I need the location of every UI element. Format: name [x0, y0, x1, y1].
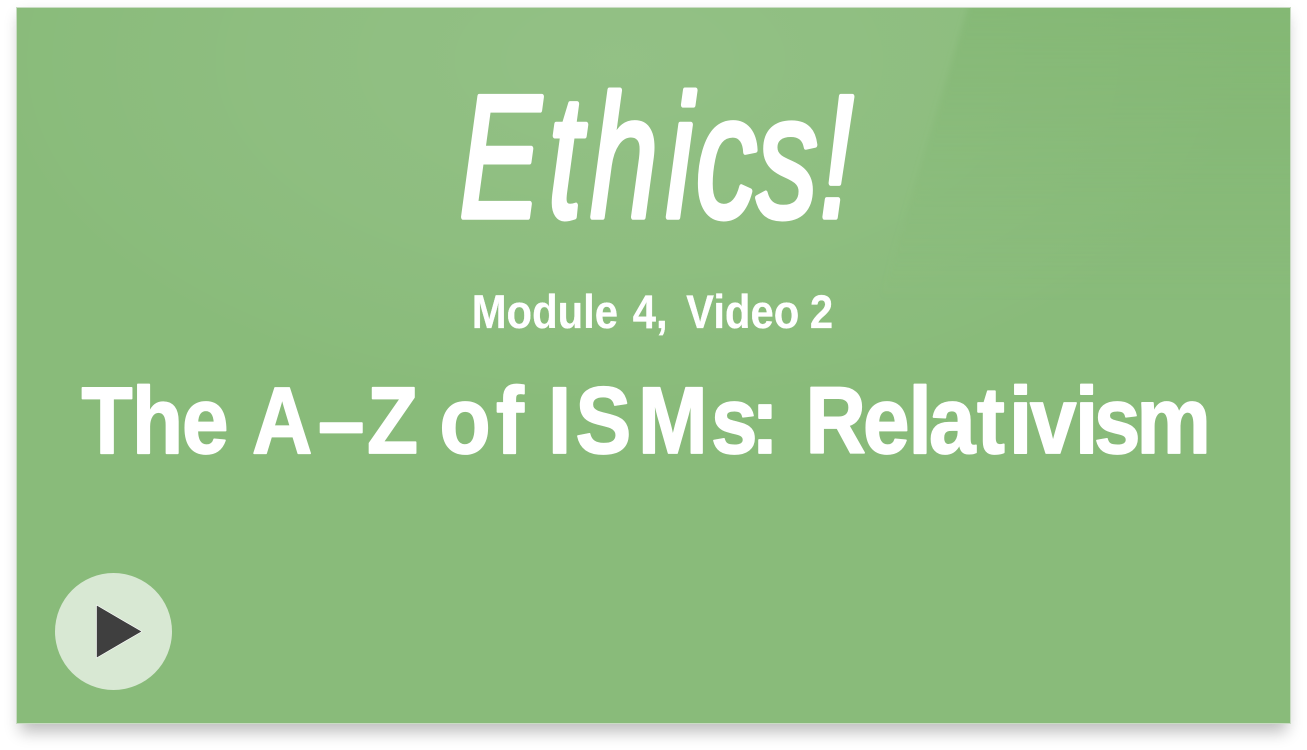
- subtitle: Module 4, Video 2: Module: [472, 287, 618, 339]
- subtitle: Module 4, Video 2: Video: [686, 287, 799, 339]
- icon: play button: [55, 573, 172, 690]
- heading: The A–Z of ISMs: Relativism: The A–Z of ISMs: Relativism: [81, 367, 1211, 473]
- subtitle: Module 4, Video 2: 2: [810, 287, 833, 339]
- title: Ethics!: Ethics!: [459, 59, 854, 255]
- subtitle: Module 4, Video 2: 4,: [633, 287, 668, 339]
